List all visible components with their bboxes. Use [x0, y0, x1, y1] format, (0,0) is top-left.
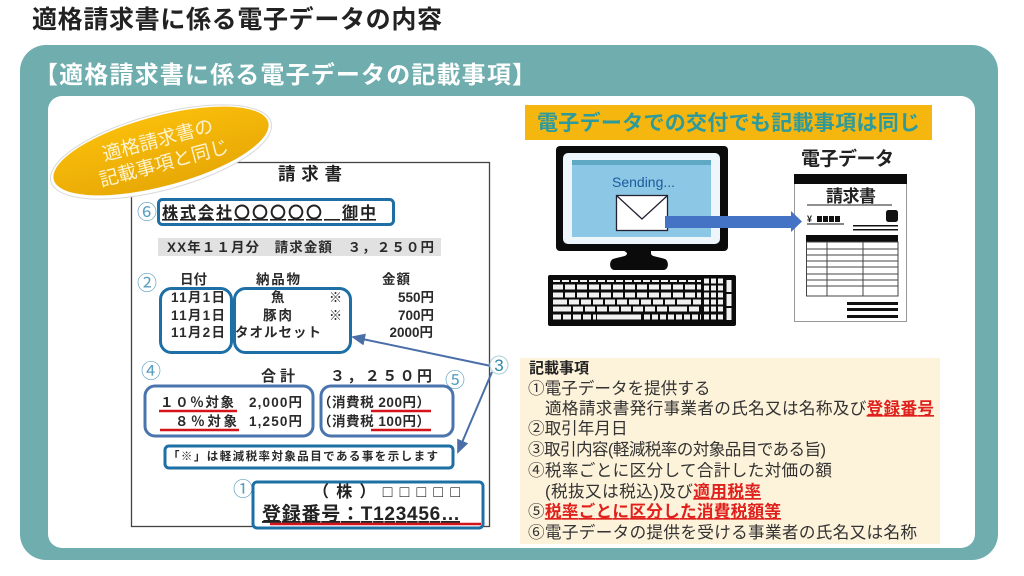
- panel: invoice document: [132, 162, 490, 528]
- item 4: total and taxable amounts: 合計: [261, 368, 295, 385]
- item 2 and 3: line items table: 550円: [398, 290, 434, 305]
- item 6: addressee box: [137, 200, 394, 224]
- item 4: total and taxable amounts: ８％対象: [175, 413, 238, 429]
- banner: same items: [525, 105, 932, 140]
- item 2 and 3: line items table: 日付: [180, 272, 208, 287]
- item 4: total and taxable amounts: 2,000円: [249, 395, 302, 410]
- item 4: total and taxable amounts: 1,250円: [249, 414, 302, 429]
- panel: required items list: ⑥電子データの提供を受ける事業者の氏名又は名称: [528, 522, 917, 542]
- title: 適格請求書に係る電子データの内容: [32, 5, 442, 34]
- heading: panel heading: 【適格請求書に係る電子データの記載事項】: [34, 61, 536, 89]
- invoice title: 請求書: [278, 164, 342, 184]
- item 4: total and taxable amounts: １０％対象: [160, 394, 234, 410]
- item 3 marker: 3: [494, 356, 504, 375]
- label: electronic data: 電子データ: [801, 147, 894, 170]
- panel: required items list: ⑤税率ごとに区分した消費税額等: [528, 501, 781, 521]
- panel: required items list: (税抜又は税込)及び適用税率: [545, 482, 761, 501]
- invoice amount bar: XX年１１月分 請求金額 ３，２５０円: [167, 239, 434, 255]
- panel: required items list: ④税率ごとに区分して合計した対価の額: [528, 461, 832, 480]
- icon: electronic invoice document: ¥: [807, 214, 812, 224]
- icon: keyboard: [548, 275, 736, 326]
- item 5: consumption tax amounts: ⑤: [445, 369, 465, 392]
- item 2 and 3: line items table: 700円: [398, 308, 434, 323]
- item 5: consumption tax amounts: [318, 369, 465, 436]
- reduced tax note: 「※」は軽減税率対象品目である事を示します: [168, 449, 438, 463]
- item 6: addressee box: 株式会社〇〇〇〇〇 御中: [162, 204, 376, 222]
- item 2 and 3: line items table: 2000円: [389, 325, 433, 340]
- banner: same items: 電子データでの交付でも記載事項は同じ: [537, 111, 920, 135]
- icon: envelope: [616, 196, 668, 230]
- arrow: computer to document: [665, 211, 802, 232]
- item 1: registration number box: [233, 478, 483, 528]
- icon: electronic invoice document: [794, 174, 907, 322]
- item 2 and 3: line items table: 魚: [271, 289, 285, 305]
- item 2 and 3: line items table: 11月1日: [171, 308, 225, 323]
- item 2 and 3: line items table: 金額: [382, 271, 410, 287]
- item 4: total and taxable amounts: [141, 360, 432, 436]
- item 4: total and taxable amounts: ④: [141, 360, 161, 383]
- callout: gold ellipse: 適格請求書の: [100, 115, 216, 166]
- item 1: registration number box: 登録番号：T123456…: [262, 503, 460, 525]
- item 2 and 3: line items table: 11月1日: [171, 290, 225, 305]
- item 5: consumption tax amounts: （消費税 100円）: [318, 413, 430, 429]
- panel: required items list: ③取引内容(軽減税率の対象品目である旨): [528, 440, 826, 459]
- item 2 and 3: line items table: 11月2日: [171, 325, 225, 340]
- item 2 and 3: line items table: タオルセット: [235, 325, 321, 340]
- item 1: registration number box: ①: [233, 478, 253, 501]
- item 6: addressee box: ⑥: [137, 201, 157, 224]
- item 2 and 3: line items table: [137, 271, 434, 352]
- item 2 and 3: line items table: ※: [329, 290, 342, 305]
- item 3 marker: [490, 356, 508, 375]
- panel: required items list: ①電子データを提供する: [528, 378, 711, 398]
- item 2 and 3: line items table: 豚肉: [263, 308, 292, 323]
- callout: gold ellipse: [41, 86, 281, 218]
- callout: gold ellipse: 記載事項と同じ: [97, 136, 231, 191]
- panel: required items list: 記載事項: [529, 359, 589, 377]
- item 2 and 3: line items table: ※: [329, 308, 342, 323]
- icon: computer monitor: [556, 146, 728, 270]
- panel: required items list: 適格請求書発行事業者の氏名又は名称及び登録番号: [545, 399, 934, 418]
- item 5: consumption tax amounts: （消費税 200円）: [318, 394, 430, 410]
- icon: computer monitor: Sending...: [612, 174, 675, 190]
- arrows: item 3 pointers: [353, 337, 492, 452]
- reduced tax note: [165, 446, 453, 468]
- item 2 and 3: line items table: ②: [137, 272, 157, 295]
- item 2 and 3: line items table: 納品物: [256, 271, 300, 287]
- panel: required items list: [520, 358, 940, 544]
- icon: electronic invoice document: 請求書: [826, 186, 876, 206]
- item 4: total and taxable amounts: ３，２５０円: [330, 368, 432, 385]
- panel: required items list: ②取引年月日: [528, 419, 628, 438]
- item 1: registration number box: （株）□□□□□: [313, 483, 460, 501]
